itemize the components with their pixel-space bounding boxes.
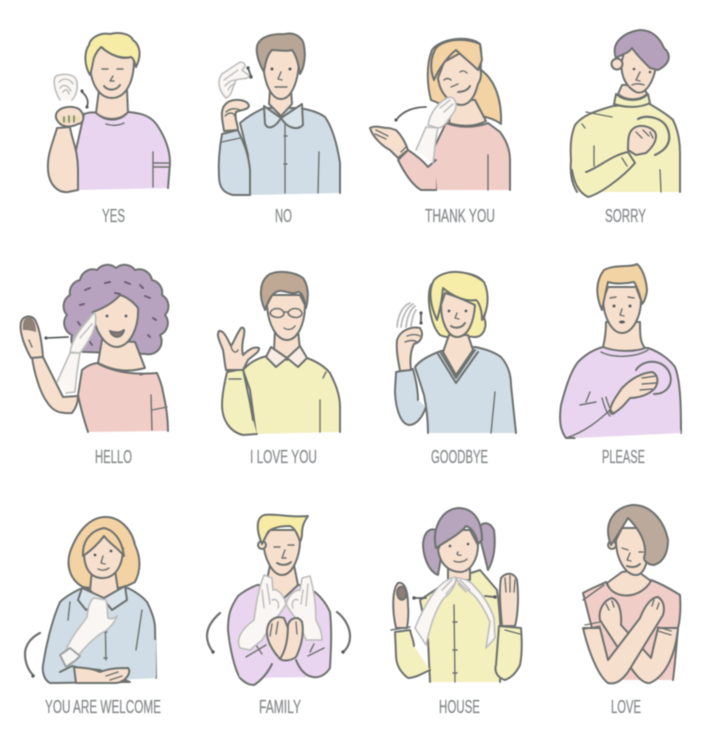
label: FAMILY: FAMILY [259, 696, 301, 717]
neck and head [96, 90, 128, 119]
figure: FAMILY [207, 515, 350, 685]
hair [257, 34, 305, 74]
label: YOU ARE WELCOME: YOU ARE WELCOME [45, 696, 161, 717]
neck and head [449, 100, 486, 126]
neck and head [618, 85, 647, 99]
fist [397, 328, 422, 371]
ghost fingers [397, 303, 416, 327]
hair [615, 30, 669, 70]
hand [222, 100, 249, 131]
arm [32, 357, 78, 413]
neck and head [603, 322, 645, 351]
blouse [43, 588, 156, 683]
mouth [284, 326, 295, 329]
face details [106, 315, 108, 317]
chest skin [607, 570, 651, 596]
motion arrow [420, 313, 422, 323]
neck and head [269, 90, 292, 116]
label: YES: YES [102, 205, 125, 226]
face details [633, 68, 635, 70]
fist [56, 107, 83, 126]
fist knuckles and sleeve cuffs [585, 600, 671, 635]
arc arrow [25, 633, 40, 675]
arm [395, 369, 426, 425]
shirt collar [266, 346, 307, 367]
arm from left sleeve to right fist [583, 597, 664, 683]
motion arrow [47, 337, 68, 338]
label: THANK YOU: THANK YOU [425, 205, 495, 226]
collar [78, 586, 127, 610]
arm [219, 130, 250, 195]
face details [270, 68, 274, 70]
left arrow [415, 597, 426, 599]
face [84, 536, 123, 578]
face details [102, 69, 123, 81]
neck and head [448, 565, 470, 580]
figure: YES [48, 33, 170, 192]
raised arm [48, 127, 78, 192]
sweater [243, 356, 340, 434]
shirt [240, 108, 340, 195]
ghost arm and hand [416, 127, 438, 163]
shirt [76, 112, 170, 190]
figure: HOUSE [391, 508, 522, 682]
left arm [395, 630, 430, 678]
neck [90, 570, 118, 606]
shirt [433, 123, 510, 190]
ghost hand [70, 313, 96, 353]
left hand [393, 583, 408, 628]
label: LOVE: LOVE [611, 696, 641, 717]
hair [258, 515, 308, 544]
neck and head [98, 340, 145, 371]
ghost right hand [286, 576, 322, 640]
lower hand [74, 667, 129, 683]
fist [628, 126, 656, 155]
figure: YOU ARE WELCOME [25, 517, 156, 683]
lower hands [267, 617, 288, 659]
hair [608, 505, 668, 565]
left arm [398, 150, 436, 190]
face details [274, 545, 294, 558]
open hand [21, 316, 43, 358]
turtleneck [614, 94, 650, 107]
right arm [495, 626, 522, 680]
label: HELLO: HELLO [95, 446, 132, 467]
circular arrow [638, 117, 669, 155]
figure: THANK YOU [370, 39, 510, 190]
open hand [370, 127, 408, 158]
face details [449, 545, 451, 547]
shirt [78, 363, 168, 432]
glasses [270, 308, 302, 318]
hair top [435, 508, 482, 548]
motion arrow [82, 92, 88, 106]
left arc arrow [207, 613, 220, 652]
label: HOUSE: HOUSE [439, 696, 480, 717]
sweater [560, 347, 681, 438]
ghost hand [219, 62, 250, 98]
hair [85, 33, 140, 75]
figure: GOODBYE [395, 272, 516, 433]
figure: HELLO [21, 265, 168, 432]
sweater [415, 347, 516, 433]
ghost arms and hands [415, 577, 456, 645]
right hand [500, 574, 518, 626]
head [616, 528, 648, 575]
circular arrow [636, 362, 671, 394]
ghost left hand [239, 575, 286, 650]
shirt [583, 580, 680, 680]
afro hair [64, 265, 168, 354]
right arc arrow [337, 612, 350, 652]
sweater [228, 585, 331, 678]
hair [597, 264, 647, 310]
ghost arm and hand [66, 598, 117, 656]
fringe [431, 40, 482, 80]
figure: SORRY [571, 30, 680, 197]
motion arrow [248, 68, 251, 76]
arm [572, 152, 635, 197]
ILY hand [218, 328, 259, 370]
neck and head [266, 565, 298, 600]
figure: LOVE [583, 505, 680, 683]
sweater [571, 103, 680, 192]
lower arms [240, 660, 313, 685]
hair back [428, 39, 501, 124]
forearm [50, 666, 130, 683]
face details [622, 548, 643, 561]
figure: PLEASE [560, 264, 681, 438]
hand on chest [610, 372, 657, 414]
neck and head [443, 335, 473, 375]
hair [261, 272, 308, 310]
figure: I LOVE YOU [218, 272, 340, 435]
face details [448, 310, 450, 312]
label: SORRY: SORRY [605, 205, 646, 226]
face details [612, 304, 616, 308]
label: GOODBYE: GOODBYE [431, 446, 488, 467]
face details [444, 71, 467, 87]
ghost arm [57, 353, 80, 393]
neck and head [274, 330, 300, 360]
arm from right sleeve to left fist [600, 598, 678, 683]
label: I LOVE YOU: I LOVE YOU [250, 446, 317, 467]
label: NO: NO [275, 205, 292, 226]
shirt [420, 570, 501, 682]
ghost fist [54, 74, 77, 100]
arm [222, 369, 257, 435]
motion arrow [397, 107, 426, 119]
right arrow [485, 596, 494, 597]
figure: NO [219, 34, 340, 195]
hair [69, 517, 140, 588]
fringe [430, 272, 488, 320]
label: PLEASE: PLEASE [602, 446, 645, 467]
face details [94, 554, 96, 556]
hair back [429, 273, 487, 337]
pigtails [423, 529, 444, 575]
